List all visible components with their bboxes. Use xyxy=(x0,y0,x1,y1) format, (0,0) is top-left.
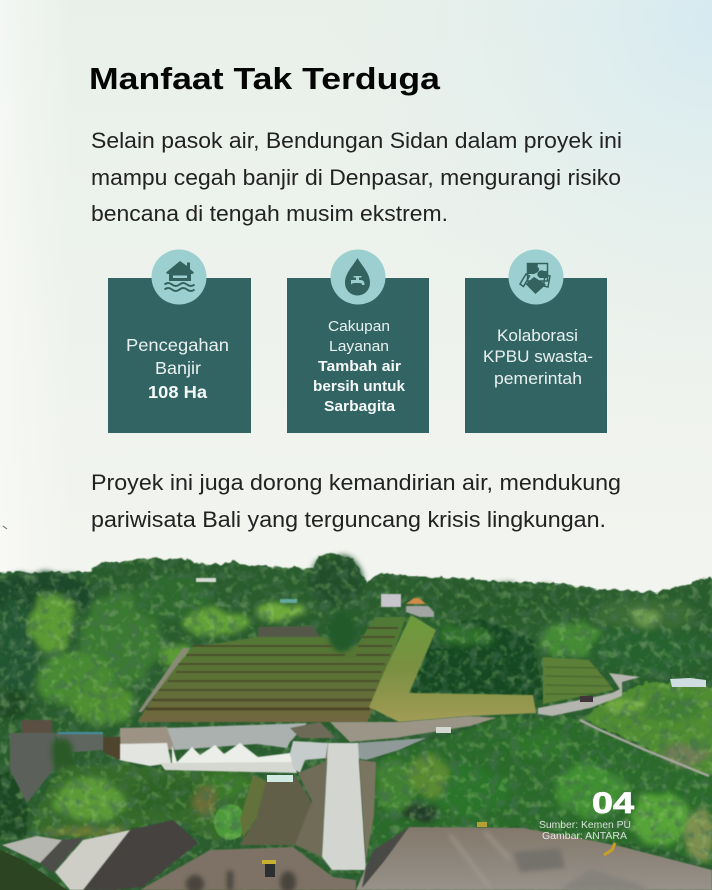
bright bush xyxy=(214,804,246,840)
card text: service coverage: bersih untuk xyxy=(313,378,406,395)
spillway side strip xyxy=(359,760,376,860)
ground shadows xyxy=(186,871,296,890)
icon: handshake over puzzle xyxy=(508,250,564,304)
olive strip xyxy=(240,775,266,838)
forest patch on terraces xyxy=(328,612,356,652)
machinery xyxy=(262,822,615,877)
dark forest mound xyxy=(411,617,544,700)
slope strip xyxy=(295,743,328,857)
card text: flood prevention: Banjir xyxy=(155,358,201,378)
card text: partnership: KPBU swasta- xyxy=(483,348,593,366)
card text: service coverage: Sarbagita xyxy=(324,398,396,415)
bottom left vegetation xyxy=(0,850,67,890)
photo: Sidan dam and surrounding hills xyxy=(0,553,712,890)
intro paragraph: mampu cegah banjir di Denpasar, mengurangi risiko xyxy=(91,165,621,190)
source credits: Sumber: Kemen PU xyxy=(539,819,631,831)
intro paragraph: Selain pasok air, Bendungan Sidan dalam proyek ini xyxy=(91,128,622,153)
intro paragraph: bencana di tengah musim ekstrem. xyxy=(91,201,448,226)
card text: partnership xyxy=(483,327,593,388)
info sign xyxy=(267,775,293,782)
ground details xyxy=(450,832,650,890)
dark trees at left edge xyxy=(0,770,27,838)
forest colour masses xyxy=(0,556,710,725)
road along dam xyxy=(330,716,496,742)
tree in front of tower xyxy=(52,737,72,773)
bird speck xyxy=(3,526,7,529)
closing paragraph: Proyek ini juga dorong kemandirian air, mendukung xyxy=(91,470,621,495)
brown slope beside spillway xyxy=(240,777,312,845)
icon: water drop with tap xyxy=(330,250,386,304)
right ground xyxy=(356,827,712,890)
card text: partnership: Kolaborasi xyxy=(497,327,578,345)
dark slope edge xyxy=(362,827,409,888)
truck on road xyxy=(580,696,593,702)
card text: service coverage: Layanan xyxy=(329,338,389,355)
card text: service coverage: Tambah air xyxy=(318,358,401,375)
source credits xyxy=(539,819,631,842)
hilltop houses xyxy=(196,578,434,617)
grassed cut slope xyxy=(369,615,536,722)
panel: flood prevention xyxy=(108,250,251,433)
closing paragraph xyxy=(91,470,621,532)
service van xyxy=(436,727,451,733)
closing paragraph: pariwisata Bali yang terguncang krisis lingkungan. xyxy=(91,507,606,532)
card text: partnership: pemerintah xyxy=(494,370,582,388)
left lower forest xyxy=(30,763,253,843)
central ground xyxy=(140,847,356,890)
access road xyxy=(538,673,640,716)
card text: flood prevention xyxy=(126,335,229,402)
right terraces xyxy=(543,657,614,704)
card text: flood prevention: Pencegahan xyxy=(126,335,229,355)
icon: flooded house xyxy=(152,250,206,304)
panel: service coverage xyxy=(287,250,429,433)
right green hill xyxy=(579,682,712,780)
main terraces xyxy=(138,617,406,722)
forest base xyxy=(0,553,712,890)
lower right forest xyxy=(369,718,712,870)
dam wall xyxy=(119,722,426,773)
building on the right xyxy=(670,678,706,687)
card text: service coverage: Cakupan xyxy=(328,318,390,335)
intro paragraph xyxy=(91,128,622,226)
card text: flood prevention: 108 Ha xyxy=(148,382,207,402)
card text: service coverage xyxy=(313,318,406,415)
left masonry tower xyxy=(10,720,120,803)
source credits: Gambar: ANTARA xyxy=(542,830,627,842)
title: Manfaat Tak Terduga xyxy=(89,61,441,96)
road edge on right hill xyxy=(580,720,709,776)
left concrete slabs xyxy=(2,820,198,890)
panel: partnership xyxy=(465,250,607,433)
canopy texture xyxy=(0,553,712,890)
concrete spillway xyxy=(322,743,366,870)
page number: 04 xyxy=(592,787,634,820)
